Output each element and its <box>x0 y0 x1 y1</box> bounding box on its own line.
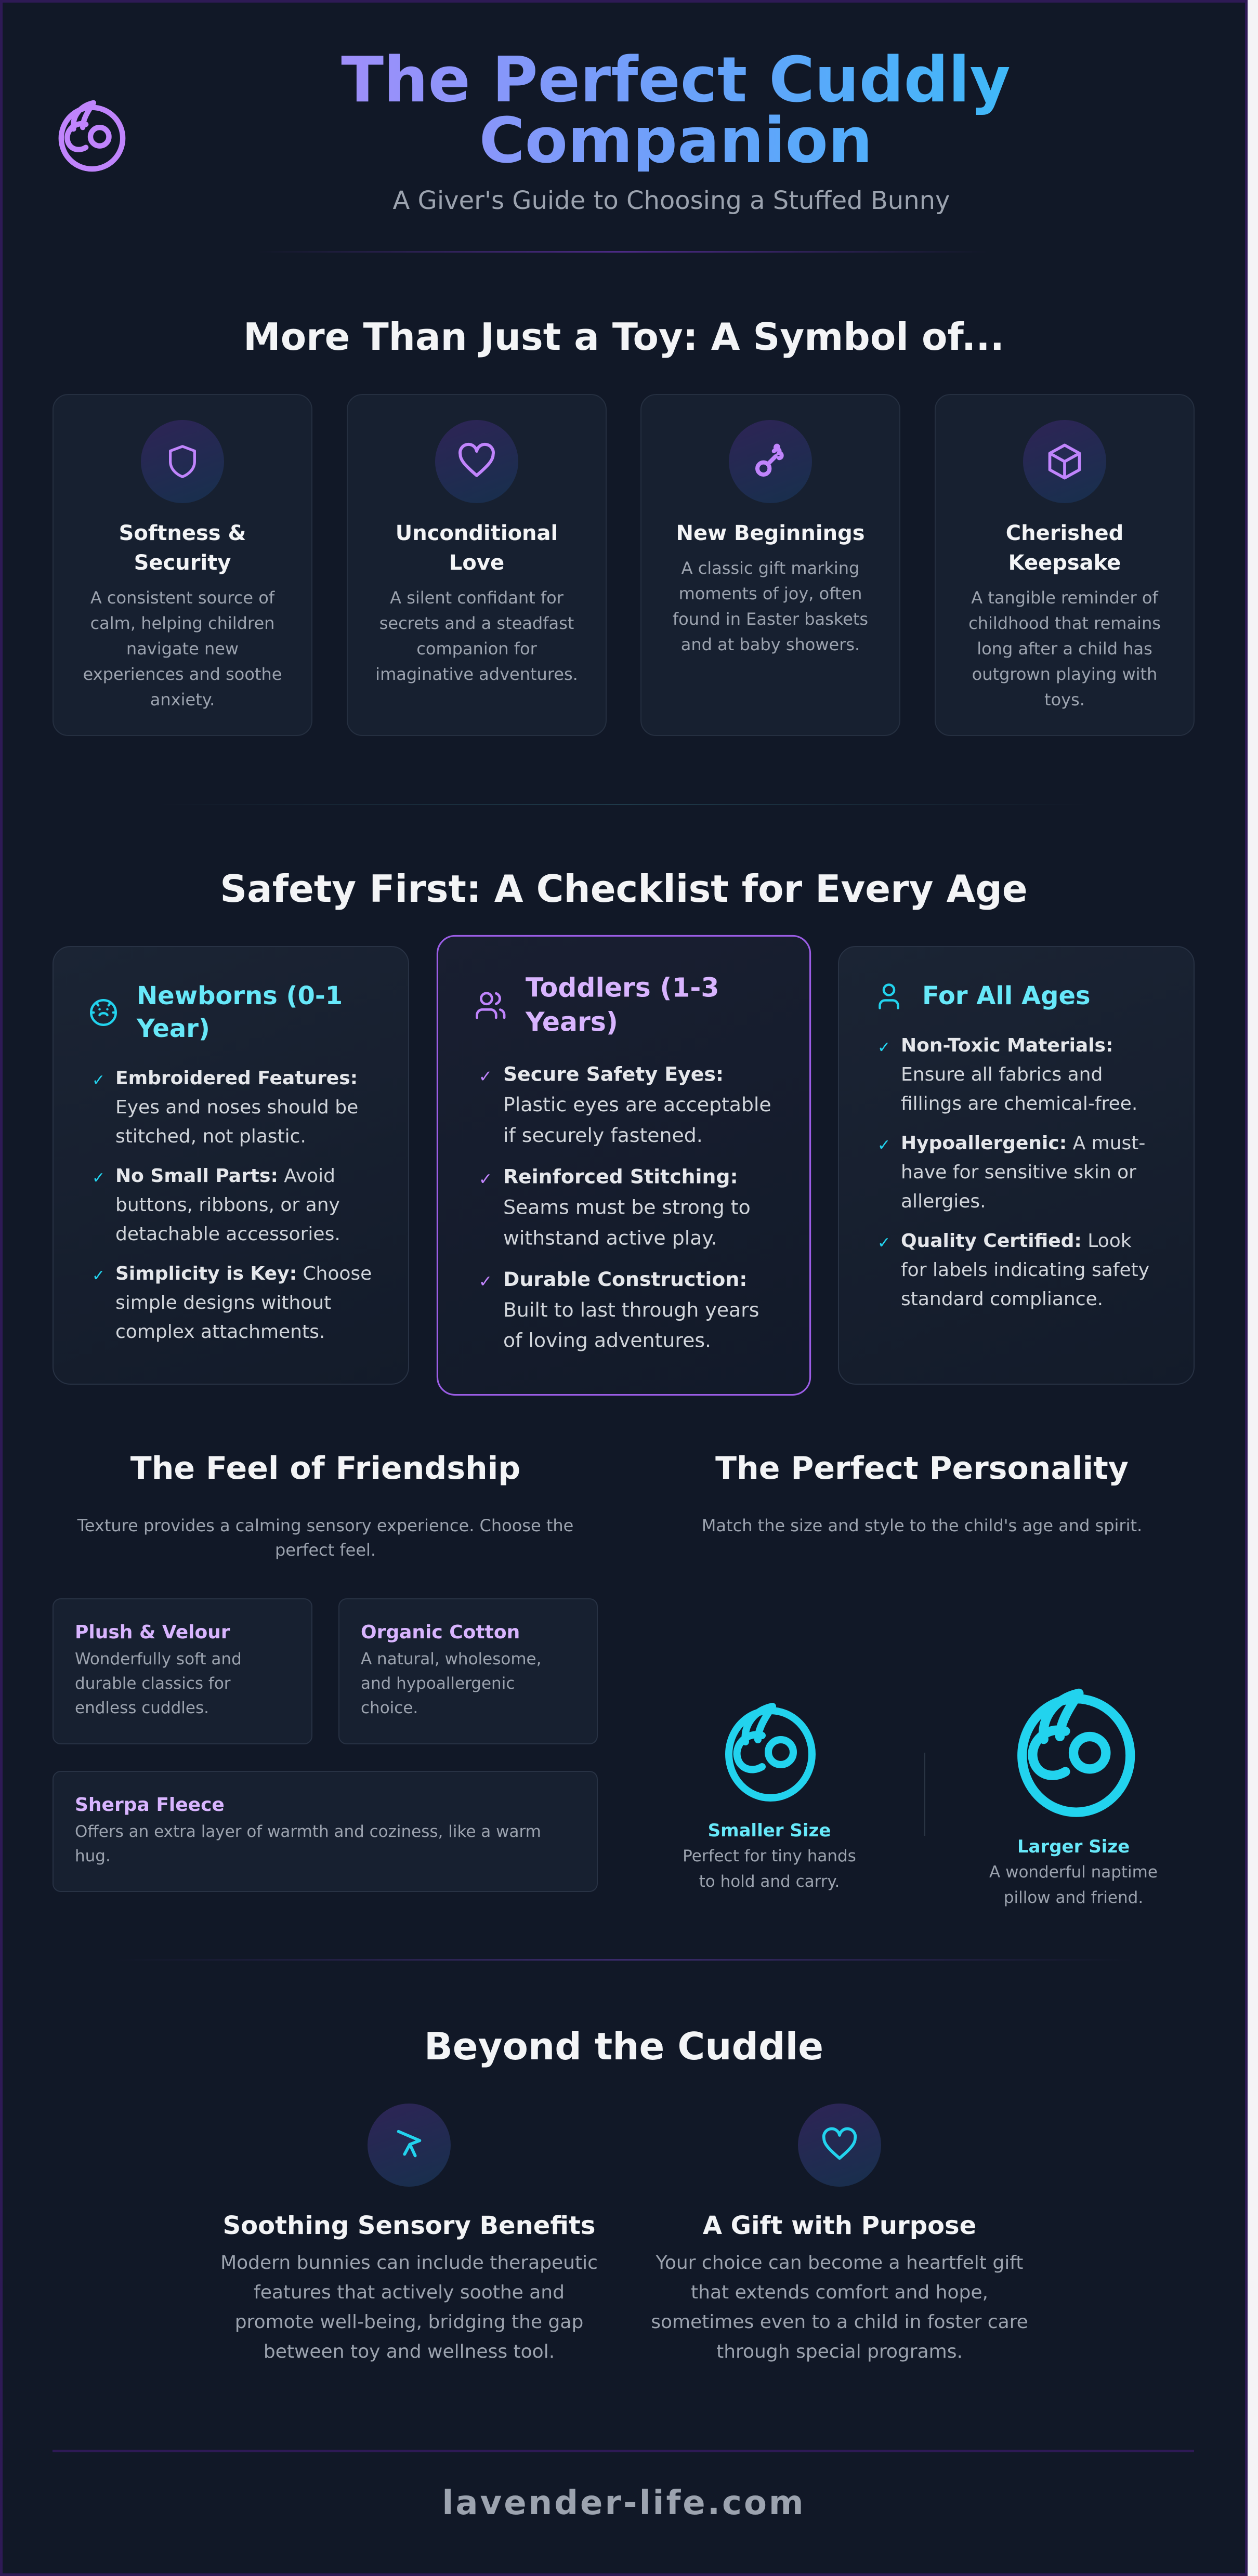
panel: a gift with purpose <box>651 2104 1028 2362</box>
icon: heart <box>798 2104 881 2187</box>
panel: all ages: Hypoallergenic: A must-have for sensitive skin or allergies. <box>901 1133 1145 1212</box>
panel: newborns: ✓ <box>92 1071 105 1089</box>
footer: website: lavender-life.com <box>442 2484 806 2522</box>
panel: toddlers: Durable Construction: Built to last through years of loving adventures. <box>503 1268 759 1352</box>
card: softness & security: A consistent source of calm, helping children navigate new experiences and soothe anxiety. <box>83 588 282 709</box>
texture card: sherpa: Sherpa Fleece <box>75 1794 225 1816</box>
texture card: plush: Wonderfully soft and durable classics for endless cuddles. <box>75 1650 242 1717</box>
card: cherished keepsake: Keepsake <box>1008 551 1121 575</box>
panel: a gift with purpose: Your choice can become a heartfelt gift that extends comfort and hope, sometimes even to a child in foster care through special programs. <box>651 2252 1028 2362</box>
text: larger size <box>989 1836 1158 1907</box>
card: cherished keepsake: A tangible reminder of childhood that remains long after a child has outgrown playing with toys. <box>968 588 1161 709</box>
card: new beginnings <box>640 394 900 736</box>
panel: soothing sensory benefits: Modern bunnies can include therapeutic features that actively soothe and promote well-being, bridging the gap between toy and wellness tool. <box>220 2252 598 2362</box>
panel: soothing sensory benefits <box>220 2104 598 2362</box>
panel: soothing sensory benefits: Soothing Sensory Benefits <box>223 2211 595 2240</box>
heading: Beyond the Cuddle: Beyond the Cuddle <box>424 2025 823 2068</box>
panel: toddlers: Reinforced Stitching: Seams must be strong to withstand active play. <box>503 1166 751 1250</box>
panel: newborns: Simplicity is Key: Choose simple designs without complex attachments. <box>115 1263 372 1343</box>
toddlers header: Toddlers (1-3 <box>526 972 719 1003</box>
icon: small bunny <box>725 1703 816 1802</box>
text: personality intro: Match the size and style to the child's age and spirit. <box>702 1516 1142 1535</box>
text: larger size: Larger Size <box>1017 1836 1130 1857</box>
card: cherished keepsake <box>935 394 1195 736</box>
card: unconditional love: Unconditional <box>396 521 558 545</box>
toddlers header: Years) <box>526 1007 618 1037</box>
texture card: sherpa: Offers an extra layer of warmth and coziness, like a warm hug. <box>75 1822 541 1865</box>
subtitle: A Giver's Guide to Choosing a Stuffed Bunny <box>393 186 950 215</box>
panel: a gift with purpose: A Gift with Purpose <box>703 2211 976 2240</box>
logo: bunny icon <box>58 100 126 172</box>
card: cherished keepsake: Cherished <box>1006 521 1123 545</box>
texture card: organic cotton: A natural, wholesome, and hypoallergenic choice. <box>361 1650 541 1717</box>
card: new beginnings: New Beginnings <box>676 521 865 545</box>
card: new beginnings: A classic gift marking moments of joy, often found in Easter baskets and at baby showers. <box>673 558 868 654</box>
text: smaller size: Smaller Size <box>708 1820 831 1841</box>
icon: large bunny <box>1017 1688 1135 1817</box>
newborns header <box>90 981 343 1043</box>
panel: toddlers <box>437 935 811 1396</box>
texture card: organic cotton <box>338 1598 598 1744</box>
card: softness & security <box>53 394 312 736</box>
text: larger size: A wonderful naptime <box>989 1863 1158 1882</box>
panel: newborns: ✓ <box>92 1169 105 1187</box>
panel: newborns: Embroidered Features: Eyes and noses should be stitched, not plastic. <box>115 1068 358 1147</box>
heading: Safety First: Safety First: A Checklist for Every Age <box>220 867 1028 911</box>
panel: toddlers: ✓ <box>479 1272 492 1292</box>
panel: toddlers: Secure Safety Eyes: Plastic eyes are acceptable if securely fastened. <box>503 1063 771 1147</box>
card: unconditional love: Love <box>449 551 504 575</box>
heading: The Perfect Personality: The Perfect Personality <box>715 1450 1129 1487</box>
text: smaller size: to hold and carry. <box>699 1872 840 1891</box>
card: unconditional love <box>347 394 607 736</box>
panel: newborns <box>53 946 409 1385</box>
text: larger size: pillow and friend. <box>1004 1888 1143 1907</box>
title <box>286 50 1066 172</box>
heading: More Than Just a Toy: More Than Just a Toy: A Symbol of... <box>243 315 1004 359</box>
all ages header: For All Ages <box>922 981 1091 1010</box>
card: unconditional love: A silent confidant for secrets and a steadfast companion for imaginative adventures. <box>375 588 578 684</box>
texture card: plush <box>53 1598 312 1744</box>
newborns header: Newborns (0-1 <box>137 981 343 1010</box>
card: softness & security: Security <box>134 551 231 575</box>
panel: all ages: ✓ <box>877 1039 890 1057</box>
panel: newborns: ✓ <box>92 1267 105 1285</box>
text: texture intro: Texture provides a calming sensory experience. Choose the perfect feel. <box>77 1516 573 1560</box>
heading: The Feel of Friendship: The Feel of Friendship <box>130 1450 520 1487</box>
panel: toddlers: ✓ <box>479 1169 492 1189</box>
panel: all ages <box>838 946 1195 1385</box>
panel: all ages: Quality Certified: Look for labels indicating safety standard compliance. <box>901 1230 1149 1310</box>
icon: pointer <box>368 2104 451 2187</box>
texture card: sherpa <box>53 1771 598 1892</box>
texture card: plush: Plush & Velour <box>75 1622 230 1643</box>
title: The Perfect Cuddly <box>341 44 1011 116</box>
newborns header: Year) <box>137 1014 210 1043</box>
toddlers header <box>476 972 719 1037</box>
panel: toddlers: ✓ <box>479 1067 492 1086</box>
panel: all ages: ✓ <box>877 1234 890 1252</box>
panel: symbol cards <box>53 394 1195 736</box>
text: smaller size: Perfect for tiny hands <box>683 1847 856 1865</box>
panel: all ages: ✓ <box>877 1136 890 1154</box>
text: smaller size <box>683 1820 856 1891</box>
panel: all ages: Non-Toxic Materials: Ensure all fabrics and fillings are chemical-free. <box>901 1035 1137 1114</box>
card: softness & security: Softness & <box>119 521 246 545</box>
title: Companion <box>479 105 872 177</box>
texture card: organic cotton: Organic Cotton <box>361 1622 520 1643</box>
panel: newborns: No Small Parts: Avoid buttons, ribbons, or any detachable accessories. <box>115 1165 340 1245</box>
